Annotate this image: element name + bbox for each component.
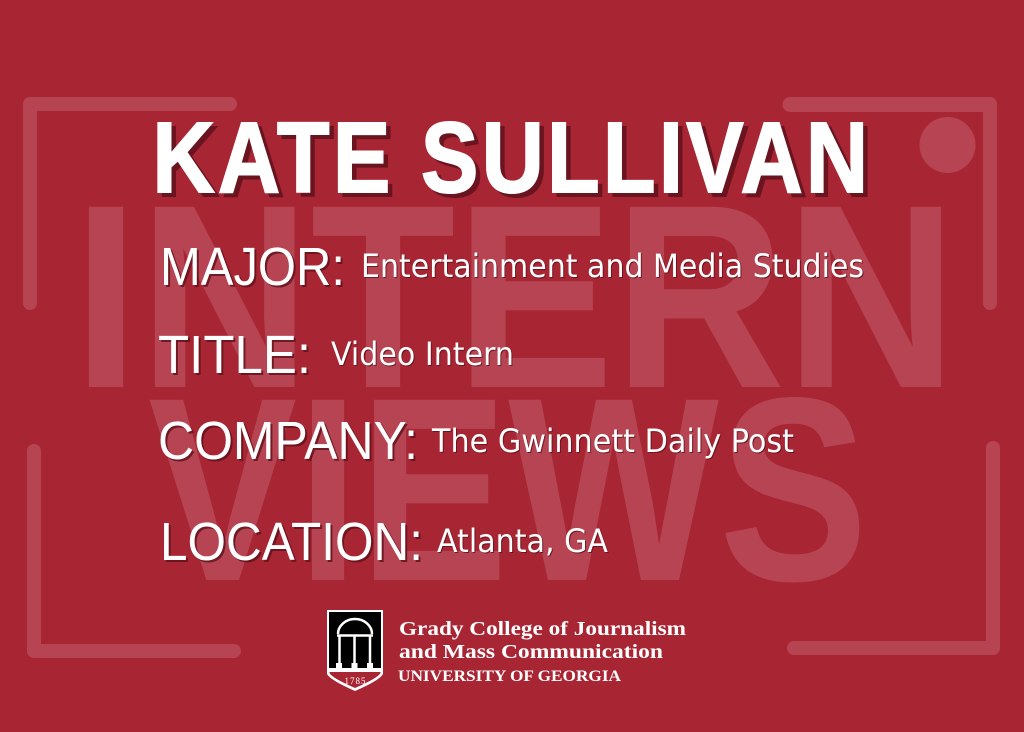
text: Grady College of Journalism: Grady College of Journalism bbox=[399, 618, 686, 640]
title: KATE SULLIVAN: KATE SULLIVAN bbox=[157, 106, 876, 217]
field: company bbox=[158, 411, 795, 473]
field: location: Atlanta, GA bbox=[438, 523, 609, 561]
field: major: Entertainment and Media Studies bbox=[362, 248, 865, 286]
field: title: Video Intern bbox=[332, 336, 515, 374]
field: major bbox=[160, 237, 865, 299]
watermark: top-right bracket bbox=[782, 97, 997, 310]
field: company: COMPANY: bbox=[158, 411, 418, 471]
field: company: COMPANY: bbox=[160, 413, 420, 473]
watermark: VIEWS: VIEWS bbox=[148, 343, 868, 636]
field: title: TITLE: bbox=[160, 327, 313, 387]
field: company: The Gwinnett Daily Post bbox=[432, 423, 795, 461]
watermark: top-left bracket bbox=[23, 97, 237, 310]
field: location bbox=[160, 512, 609, 574]
watermark: camera frame and INTERN VIEWS bbox=[23, 97, 1000, 658]
icon: University of Georgia arch shield bbox=[327, 610, 383, 691]
field: location: LOCATION: bbox=[162, 514, 425, 574]
field: location: Atlanta, GA bbox=[437, 522, 608, 560]
logo: Grady College lockup bbox=[327, 610, 686, 691]
watermark: record dot bbox=[920, 117, 976, 173]
watermark: bottom-left bracket bbox=[27, 444, 241, 658]
field: title: Video Intern bbox=[331, 335, 514, 373]
title: KATE SULLIVAN: KATE SULLIVAN bbox=[152, 102, 872, 213]
watermark: INTERN: INTERN bbox=[73, 150, 957, 443]
field: location: LOCATION: bbox=[160, 512, 423, 572]
field: title bbox=[158, 325, 515, 387]
field: major: MAJOR: bbox=[160, 237, 345, 297]
text: and Mass Communication: and Mass Communication bbox=[399, 641, 663, 663]
field: major: Entertainment and Media Studies bbox=[361, 247, 864, 285]
field: major: MAJOR: bbox=[162, 239, 347, 299]
text: University of Georgia: UNIVERSITY OF GEORGIA bbox=[398, 668, 621, 685]
field: company: The Gwinnett Daily Post bbox=[431, 422, 794, 460]
field: title: TITLE: bbox=[158, 325, 311, 385]
icon: University of Georgia arch shield: 1785 bbox=[344, 676, 366, 686]
watermark: bottom-right bracket bbox=[787, 441, 1000, 655]
